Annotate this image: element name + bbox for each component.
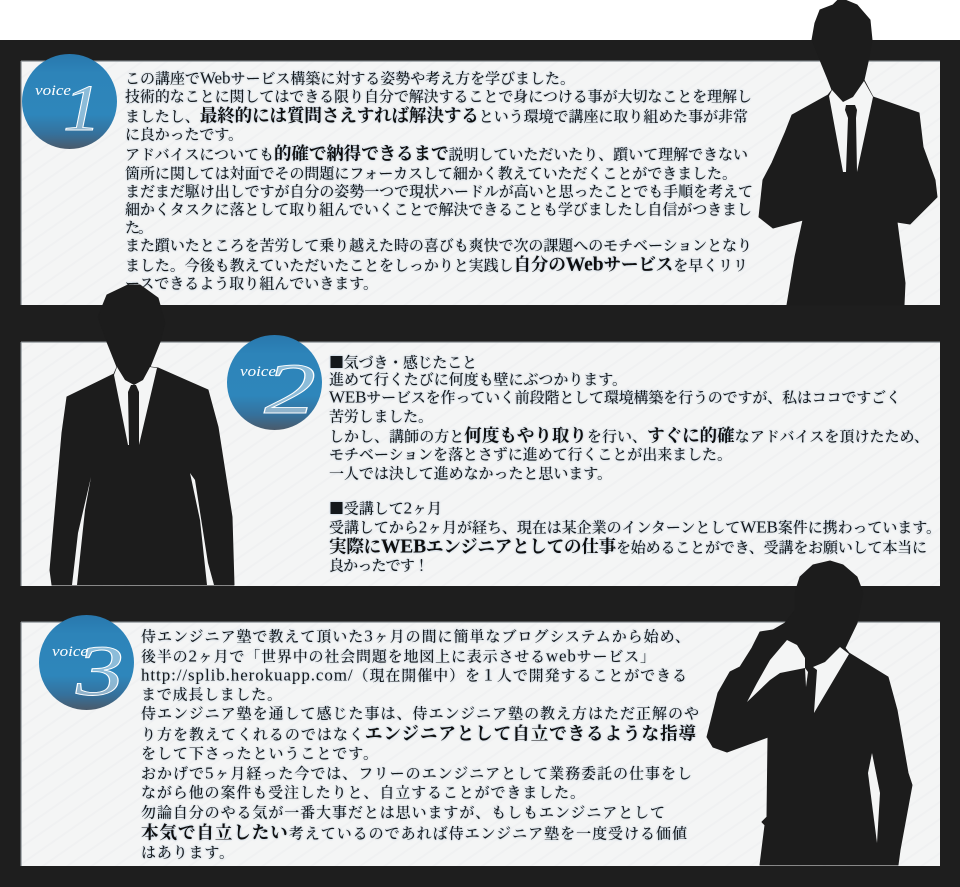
panel: voice 3 xyxy=(20,561,940,866)
panel 1 testimonial text: アドバイスについても的確で納得できるまで説明していただいたり、躓いて理解できない xyxy=(125,144,748,164)
badge: voice 2: 2 xyxy=(264,349,316,429)
panel 2 testimonial text: 受講してから2ヶ月が経ち、現在は某企業のインターンとしてWEB案件に携わっています。 xyxy=(329,518,941,536)
silhouette: man in suit, arms at sides xyxy=(50,285,234,585)
badge: voice 3 xyxy=(39,615,134,711)
panel 3 testimonial text: り方を教えてくれるのではなくエンジニアとして自立できるような指導 xyxy=(141,724,696,744)
panel 2 testimonial text: 良かったです！ xyxy=(329,556,429,574)
badge: voice 3: 3 xyxy=(75,631,124,711)
panel 2 testimonial text: 苦労しました。 xyxy=(329,408,433,426)
panel 2 testimonial text: 実際にWEBエンジニアとしての仕事を始めることができ、受講をお願いして本当に xyxy=(329,536,927,558)
panel 3 paper xyxy=(21,622,940,866)
panel 3 testimonial text: 侍エンジニア塾を通して感じた事は、侍エンジニア塾の教え方はただ正解のや xyxy=(141,704,699,722)
panel 3 testimonial text: をして下さったということです。 xyxy=(141,746,378,762)
badge: voice 3: voice xyxy=(52,644,88,660)
panel 3 testimonial text: まで成長しました。 xyxy=(141,686,282,704)
badge: voice 2: voice xyxy=(240,364,276,380)
panel 2 testimonial text: ■受講して2ヶ月 xyxy=(329,498,442,518)
panel 1 testimonial text: ました。今後も教えていただいたことをしっかりと実践し自分のWebサービスを早くリリ xyxy=(125,254,748,276)
panel 1 testimonial text: 細かくタスクに落として取り組んでいくことで解決できることも学びましたし自信がつきまし xyxy=(125,200,752,218)
badge: voice 2 xyxy=(227,335,322,430)
panel 3 testimonial text: はあります。 xyxy=(141,844,234,862)
panel 2 testimonial text: 進めて行くたびに何度も壁にぶつかります。 xyxy=(329,370,627,388)
panel 1 testimonial text: ースできるよう取り組んでいきます。 xyxy=(125,276,378,292)
panel 3 testimonial text xyxy=(141,626,699,862)
panel 3 testimonial text: 後半の2ヶ月で「世界中の社会問題を地図上に表示させるwebサービス」 xyxy=(141,646,655,666)
panel 2 testimonial text: 一人では決して進めなかったと思います。 xyxy=(329,466,612,482)
panel 2 testimonial text: しかし、講師の方と何度もやり取りを行い、すぐに的確なアドバイスを頂けたため、 xyxy=(329,426,929,446)
panel 3 testimonial text: 本気で自立したい考えているのであれば侍エンジニア塾を一度受ける価値 xyxy=(141,822,687,842)
silhouette: man in suit, hands clasped xyxy=(759,0,937,305)
panel 3 testimonial text: おかげで5ヶ月経った今では、フリーのエンジニアとして業務委託の仕事をし xyxy=(141,764,692,782)
panel: voice 1 xyxy=(20,0,940,305)
panel 1 testimonial text: ましたし、最終的には質問さえすれば解決するという環境で講座に取り組めた事が非常 xyxy=(125,106,748,126)
panel 1 testimonial text: また躓いたところを苦労して乗り越えた時の喜びも爽快で次の課題へのモチベーションとなり xyxy=(125,236,752,254)
badge: voice 1: voice xyxy=(35,83,71,99)
panel 2 testimonial text: モチベーションを落とさずに進めて行くことが出来ました。 xyxy=(329,446,732,464)
panel 1 testimonial text: まだまだ駆け出しですが自分の姿勢一つで現状ハードルが高いと思ったことでも手順を考えて xyxy=(125,182,753,200)
panel 2 testimonial text: WEBサービスを作っていく前段階として環境構築を行うのですが、私はココですごく xyxy=(329,388,901,406)
panel 3 testimonial text: ながら他の案件も受注したりと、自立することができました。 xyxy=(141,784,585,802)
panel 1 testimonial text xyxy=(125,68,753,292)
panel 3 testimonial text: http://splib.herokuapp.com/（現在開催中）を１人で開発することができる xyxy=(141,666,687,684)
panel 1 paper xyxy=(21,61,940,305)
panel 2 paper xyxy=(21,342,940,586)
panel: voice 2 xyxy=(20,285,941,586)
panel 1 testimonial text: に良かったです。 xyxy=(125,126,243,144)
panel 1 testimonial text: 技術的なことに関してはできる限り自分で解決することで身につける事が大切なことを理解し xyxy=(125,88,752,106)
panel 2 testimonial text: ■気づき・感じたこと xyxy=(329,352,477,372)
silhouette: man in suit, on the phone xyxy=(707,561,912,865)
panel 1 testimonial text: この講座でWebサービス構築に対する姿勢や考え方を学びました。 xyxy=(125,68,575,88)
panel 3 testimonial text: 侍エンジニア塾で教えて頂いた3ヶ月の間に簡単なブログシステムから始め、 xyxy=(141,626,690,646)
badge: voice 1 xyxy=(22,54,117,149)
panel 1 testimonial text: た。 xyxy=(125,220,153,236)
badge: voice 1: 1 xyxy=(63,72,101,145)
panel 3 testimonial text: 勿論自分のやる気が一番大事だとは思いますが、もしもエンジニアとして xyxy=(141,804,665,822)
panel 2 testimonial text xyxy=(329,352,941,574)
panel 1 testimonial text: 箇所に関しては対面でその問題にフォーカスして細かく教えていただくことができました。 xyxy=(125,164,737,182)
